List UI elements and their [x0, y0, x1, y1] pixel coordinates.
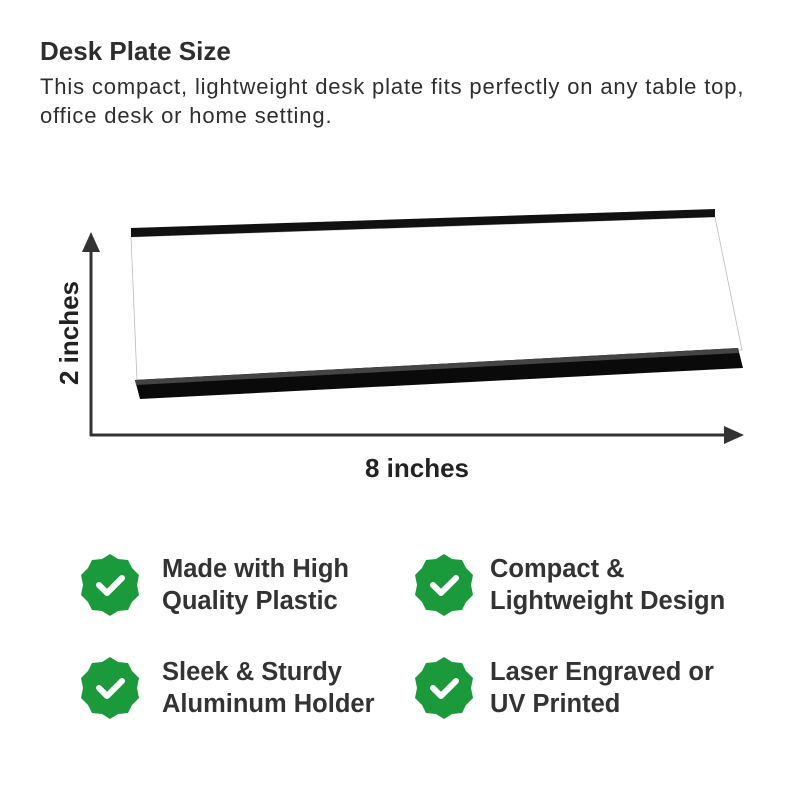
feature 4 text: Laser Engraved or	[490, 658, 714, 686]
feature 1 text: Quality Plastic	[162, 587, 338, 615]
plate face	[131, 209, 743, 399]
icon: check badge 1	[81, 554, 139, 616]
label: 8 inches: 8 inches	[365, 453, 469, 483]
label: 2 inches: 2 inches	[54, 281, 84, 385]
feature 1 text: Made with High	[162, 555, 349, 583]
icon: check badge 3	[81, 657, 139, 719]
subtitle: office desk or home setting.	[40, 103, 332, 128]
feature 3 text	[162, 658, 375, 718]
subtitle: This compact, lightweight desk plate fits perfectly on any table top,	[40, 74, 744, 99]
feature 2 text	[490, 555, 725, 615]
subtitle	[40, 74, 744, 128]
feature 4 text	[490, 658, 714, 718]
title: Desk Plate Size	[40, 36, 231, 66]
feature 1 text	[162, 555, 349, 615]
axes arrows	[82, 232, 744, 444]
feature 2 text: Lightweight Design	[490, 587, 725, 615]
feature 3 text: Aluminum Holder	[162, 690, 375, 718]
feature 4 text: UV Printed	[490, 690, 620, 718]
diagram: desk plate with dimension axes	[54, 209, 744, 483]
feature 3 text: Sleek & Sturdy	[162, 658, 342, 686]
feature 2 text: Compact &	[490, 555, 625, 583]
features list	[81, 554, 725, 719]
icon: check badge 4	[415, 657, 473, 719]
icon: check badge 2	[415, 554, 473, 616]
